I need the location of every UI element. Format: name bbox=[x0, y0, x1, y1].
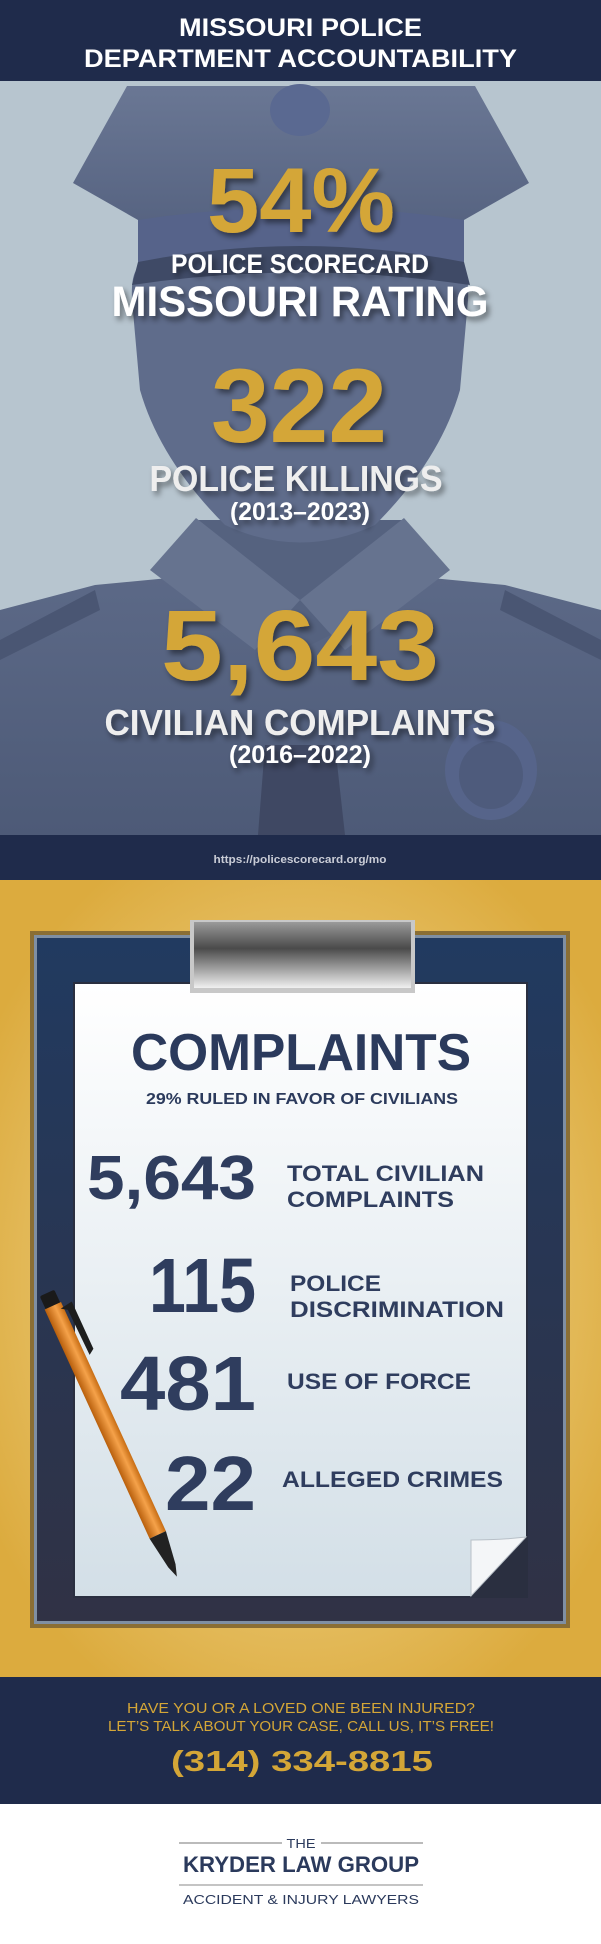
title: DEPARTMENT ACCOUNTABILITY bbox=[84, 45, 517, 73]
stat: 322 police killings: 322 bbox=[211, 348, 387, 465]
stat row: use of force: USE OF FORCE bbox=[287, 1369, 471, 1394]
stat: 5,643 civilian complaints: CIVILIAN COMPLAINTS bbox=[104, 702, 496, 743]
stat: 5,643 civilian complaints: 5,643 bbox=[161, 590, 439, 702]
complaints section bbox=[0, 880, 601, 1677]
call to action band: HAVE YOU OR A LOVED ONE BEEN INJURED? bbox=[127, 1700, 475, 1717]
title bbox=[84, 14, 517, 73]
icon: officer silhouette bbox=[0, 84, 601, 835]
clip bbox=[190, 920, 415, 993]
phone number: (314) 334-8815 bbox=[171, 1746, 433, 1778]
footer logo: KRYDER LAW GROUP bbox=[183, 1852, 419, 1877]
paper bbox=[73, 982, 528, 1598]
source url band bbox=[0, 835, 601, 880]
header band bbox=[0, 0, 601, 81]
stat: 54% police scorecard rating: POLICE SCORECARD bbox=[171, 249, 429, 279]
stat row: discrimination: 115 bbox=[149, 1243, 256, 1329]
footer logo: THE bbox=[286, 1836, 316, 1851]
hero panel: police officer silhouette bbox=[0, 81, 601, 835]
stat: 54% police scorecard rating: MISSOURI RATING bbox=[112, 278, 488, 326]
subheading: 29% RULED IN FAVOR OF CIVILIANS bbox=[146, 1091, 458, 1108]
stat: 5,643 civilian complaints bbox=[104, 590, 496, 769]
stat: 54% police scorecard rating bbox=[112, 150, 488, 326]
stat row: total complaints: TOTAL CIVILIAN bbox=[287, 1161, 484, 1186]
footer logo: ACCIDENT & INJURY LAWYERS bbox=[183, 1892, 419, 1907]
stat row: discrimination bbox=[149, 1243, 504, 1329]
footer logo bbox=[0, 1804, 601, 1944]
stat row: alleged crimes bbox=[165, 1441, 503, 1527]
stat: 5,643 civilian complaints: (2016–2022) bbox=[229, 741, 371, 769]
stat: 322 police killings: (2013–2023) bbox=[230, 498, 370, 526]
stat row: total complaints: COMPLAINTS bbox=[287, 1187, 454, 1212]
stat row: use of force: 481 bbox=[120, 1341, 256, 1427]
source url band: https://policescorecard.org/mo bbox=[214, 854, 387, 866]
title: MISSOURI POLICE bbox=[179, 14, 422, 42]
call to action band: LET’S TALK ABOUT YOUR CASE, CALL US, IT’S FREE! bbox=[108, 1718, 494, 1735]
stat: 322 police killings bbox=[150, 348, 442, 526]
stat: 54% police scorecard rating: 54% bbox=[207, 150, 395, 252]
stat row: total complaints bbox=[87, 1144, 484, 1213]
stat row: alleged crimes: ALLEGED CRIMES bbox=[282, 1467, 503, 1492]
stat row: alleged crimes: 22 bbox=[165, 1441, 256, 1527]
stat: 322 police killings: POLICE KILLINGS bbox=[150, 458, 442, 499]
clipboard bbox=[30, 920, 570, 1628]
heading: complaints: COMPLAINTS bbox=[131, 1024, 471, 1082]
icon: pen bbox=[39, 1285, 194, 1580]
stat row: use of force bbox=[120, 1341, 471, 1427]
stat row: discrimination: POLICE bbox=[290, 1271, 381, 1296]
stat row: discrimination: DISCRIMINATION bbox=[290, 1297, 504, 1322]
stat row: total complaints: 5,643 bbox=[87, 1144, 256, 1213]
call to action band bbox=[0, 1677, 601, 1804]
